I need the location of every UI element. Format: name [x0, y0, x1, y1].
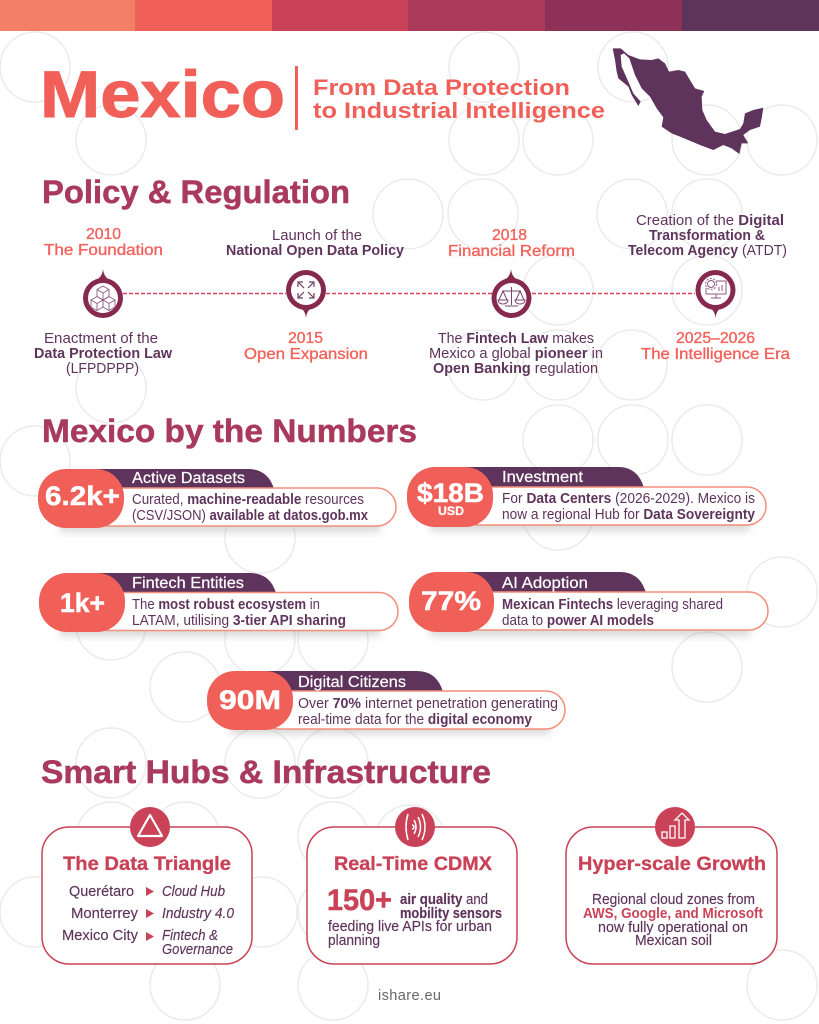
stat card: Active Datasets	[38, 469, 396, 532]
panel: The Data Triangle: Querétaro	[69, 884, 134, 900]
stat card: Active Datasets: Curated, machine-readable resources	[132, 492, 364, 508]
panel: Real-Time CDMX: feeding live APIs for urban	[328, 919, 492, 935]
icon: map of Mexico	[613, 48, 763, 154]
stat card: AI Adoption: data to power AI models	[502, 613, 654, 629]
stat card: Active Datasets: (CSV/JSON) available at datos.gob.mx	[132, 508, 368, 524]
stat card: Digital Citizens: Digital Citizens	[298, 674, 406, 691]
milestone 2025-2026: 2025–2026	[676, 330, 755, 347]
panel: Hyper-scale Growth: AWS, Google, and Microsoft	[583, 906, 763, 922]
milestone 2025-2026: Transformation &	[649, 227, 765, 244]
panel: The Data Triangle: Mexico City	[62, 928, 139, 944]
milestone 2025-2026: Creation of the Digital	[636, 212, 784, 229]
icon: growth bars	[662, 813, 689, 838]
milestone 2010: The Foundation	[44, 242, 163, 259]
milestone 2018: Open Banking regulation	[433, 360, 598, 377]
milestone 2010: Enactment of the	[44, 330, 158, 347]
footer: ishare.eu	[378, 988, 441, 1004]
milestone 2018: Mexico a global pioneer in	[429, 345, 603, 362]
stat card: Fintech Entities: The most robust ecosystem in	[132, 597, 320, 613]
panel: Hyper-scale Growth: Regional cloud zones from	[592, 892, 755, 908]
stat card: Fintech Entities: LATAM, utilising 3-tier API sharing	[132, 613, 346, 629]
milestone 2010: (LFPDPPP)	[66, 360, 139, 377]
stat card: AI Adoption: Mexican Fintechs leveraging shared	[502, 597, 723, 613]
stat card: Investment: $18B	[417, 478, 484, 508]
milestone 2018	[429, 227, 603, 377]
milestone 2018: The Fintech Law makes	[438, 330, 594, 347]
stat card: Fintech Entities	[39, 573, 398, 636]
stat card: Investment: USD	[438, 504, 464, 518]
subtitle: to Industrial Intelligence	[313, 98, 605, 123]
panel: Real-Time CDMX: planning	[328, 933, 380, 949]
milestone 2010: Data Protection Law	[34, 345, 172, 362]
top colour bar	[0, 0, 819, 31]
panel: The Data Triangle: Governance	[162, 942, 233, 958]
stat card: AI Adoption: 77%	[421, 586, 481, 616]
icon: sensor waves	[406, 814, 425, 840]
panel: The Data Triangle: Industry 4.0	[162, 906, 234, 922]
milestone 2025-2026: The Intelligence Era	[641, 346, 790, 363]
panel: Hyper-scale Growth: Mexican soil	[635, 933, 712, 949]
panel: Hyper-scale Growth: now fully operational on	[598, 920, 748, 936]
stat card: Investment: Investment	[502, 469, 584, 486]
subtitle	[313, 75, 605, 123]
heading: Policy & Regulation: Policy & Regulation	[42, 174, 350, 210]
panel: Hyper-scale Growth	[566, 807, 777, 964]
panel: Real-Time CDMX: Real-Time CDMX	[334, 853, 492, 875]
title: Mexico	[40, 57, 285, 131]
stat card: Investment: For Data Centers (2026-2029). Mexico is	[502, 491, 755, 507]
milestone 2015: National Open Data Policy	[226, 242, 405, 259]
icon: gear and screen	[706, 278, 726, 298]
milestone 2010	[34, 226, 172, 377]
milestone 2025-2026	[628, 212, 790, 363]
panel: The Data Triangle: Fintech &	[162, 928, 218, 944]
milestone 2010: 2010	[86, 226, 121, 243]
milestone 2018: Financial Reform	[448, 243, 575, 260]
icon: scales	[498, 287, 525, 306]
stat card: Active Datasets: Active Datasets	[132, 470, 245, 487]
stat card: Fintech Entities: Fintech Entities	[132, 575, 244, 592]
timeline	[34, 212, 790, 377]
panel: Real-Time CDMX: 150+	[327, 884, 392, 917]
milestone 2018: 2018	[492, 227, 527, 244]
heading: Smart Hubs & Infrastructure: Smart Hubs & Infrastructure	[41, 754, 491, 790]
stat card: Digital Citizens: 90M	[219, 685, 281, 715]
milestone 2015: Launch of the	[272, 227, 362, 244]
panel: Real-Time CDMX: air quality and	[400, 892, 488, 908]
stat card: Digital Citizens	[207, 671, 565, 734]
milestone 2025-2026: Telecom Agency (ATDT)	[628, 242, 787, 259]
panel: The Data Triangle: Monterrey	[71, 906, 139, 922]
stat card: Investment	[407, 467, 766, 531]
milestone 2015: 2015	[288, 330, 323, 347]
stat card: Digital Citizens: Over 70% internet penetration generating	[298, 696, 558, 712]
panel: Real-Time CDMX: mobility sensors	[400, 906, 502, 922]
icon: expand arrows	[298, 282, 314, 298]
stat card: Investment: now a regional Hub for Data Sovereignty	[502, 507, 755, 523]
panel: The Data Triangle: Cloud Hub	[162, 884, 225, 900]
subtitle: From Data Protection	[313, 75, 570, 100]
milestone 2015	[226, 227, 405, 363]
milestone 2015: Open Expansion	[244, 346, 368, 363]
panel: Real-Time CDMX	[307, 807, 517, 964]
stat card: Digital Citizens: real-time data for the digital economy	[298, 712, 532, 728]
panel: The Data Triangle: The Data Triangle	[63, 853, 231, 875]
stat card: AI Adoption: AI Adoption	[502, 575, 588, 592]
heading: Mexico by the Numbers: Mexico by the Numbers	[42, 413, 417, 449]
panel: The Data Triangle	[42, 807, 252, 964]
panel: Hyper-scale Growth: Hyper-scale Growth	[578, 853, 766, 875]
stat card: Fintech Entities: 1k+	[60, 588, 105, 618]
stat card: AI Adoption	[409, 572, 768, 636]
icon: cubes	[91, 286, 115, 310]
stat card: Active Datasets: 6.2k+	[45, 481, 120, 511]
icon: triangle	[138, 815, 162, 836]
